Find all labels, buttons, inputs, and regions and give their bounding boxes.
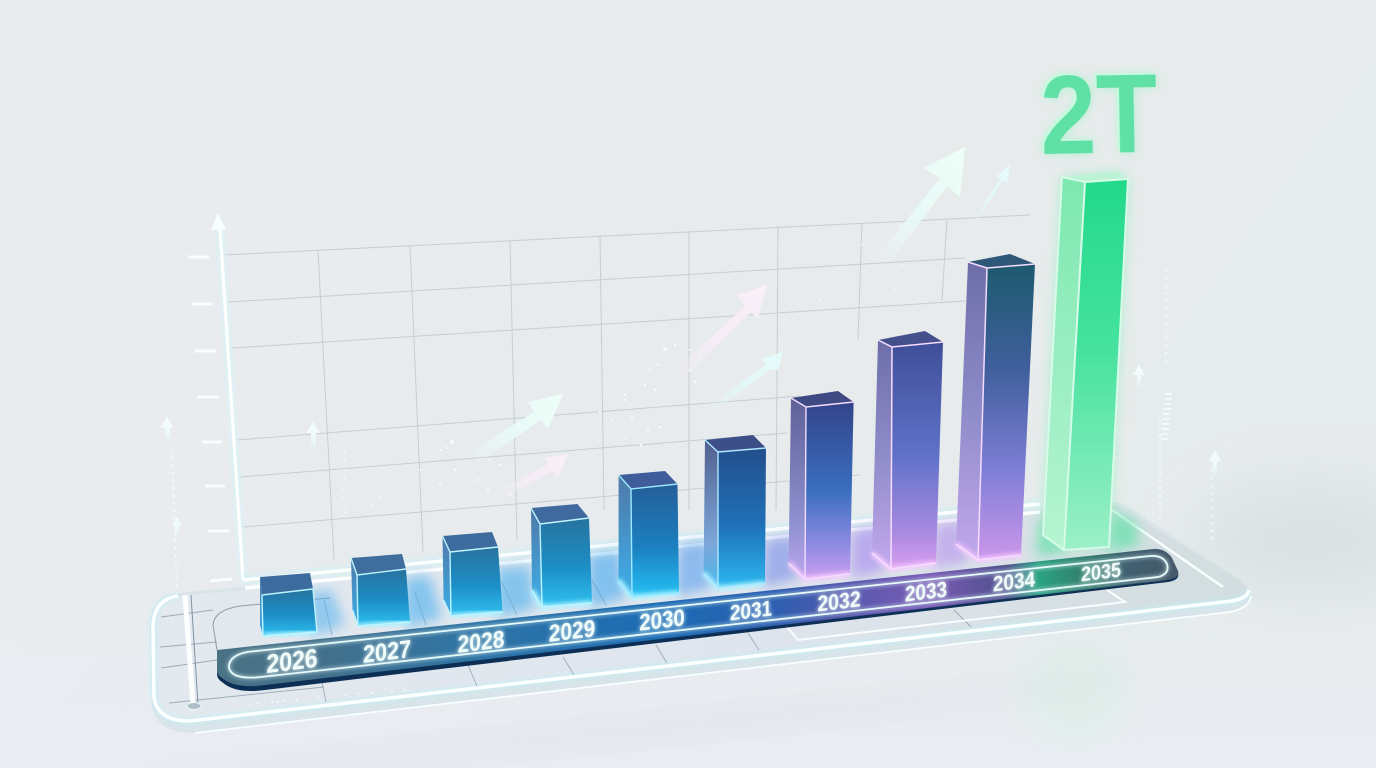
- year labels: 2029: [549, 615, 595, 647]
- bar 2029: [531, 504, 592, 607]
- dotted vertical traces: [172, 270, 1212, 595]
- arrow: pink upper: [673, 285, 767, 382]
- front rim highlights: [153, 590, 1249, 721]
- year labels: 2030: [639, 604, 685, 636]
- year labels: [266, 558, 1121, 680]
- arrow: blue middle: [710, 352, 783, 410]
- year labels: 2026: [266, 643, 318, 680]
- platform front dots: [250, 690, 405, 704]
- recess arc on platform: [213, 598, 330, 650]
- bar 2034: [956, 254, 1035, 560]
- floor grid lines: [160, 580, 971, 703]
- year labels: 2027: [363, 635, 411, 668]
- bar 2032: [789, 391, 854, 579]
- arrow: blue upper: [973, 165, 1010, 222]
- bar 2027: [351, 554, 410, 626]
- white edge on right of platform: [1112, 510, 1223, 587]
- year labels: 2034: [993, 567, 1036, 597]
- year strip: [217, 549, 1178, 691]
- bar 2035: [1043, 172, 1128, 550]
- year labels: 2032: [817, 587, 861, 617]
- platform: [142, 502, 1251, 768]
- small upward arrows: [160, 365, 1221, 537]
- y axis with arrow and ticks: [188, 213, 243, 581]
- year labels: 2033: [905, 577, 947, 607]
- white bracket on platform: [787, 590, 1125, 640]
- rear base rails: [243, 504, 1040, 588]
- arrow: green upper: [877, 147, 965, 262]
- bar 2026: [260, 573, 317, 636]
- year labels: 2031: [730, 596, 772, 626]
- hatch marks on right: [1161, 394, 1172, 439]
- growth arrows: [470, 147, 1010, 497]
- bar 2030: [619, 471, 679, 597]
- bar 2031: [704, 435, 766, 588]
- bar glow on floor: [308, 510, 1140, 638]
- year labels: 2035: [1081, 558, 1121, 587]
- chart grid: [224, 215, 1030, 560]
- big value label: 2T: [1039, 51, 1158, 178]
- arrow: green lower: [470, 394, 563, 462]
- bars: [260, 172, 1128, 636]
- arrow: pink lower: [500, 454, 568, 497]
- particle dots: [343, 208, 978, 513]
- year labels: 2028: [458, 625, 504, 658]
- vertical rod at left of platform: [185, 595, 201, 710]
- bar 2033: [872, 331, 943, 569]
- strip inner outline: [229, 556, 1168, 678]
- bar 2028: [442, 532, 502, 616]
